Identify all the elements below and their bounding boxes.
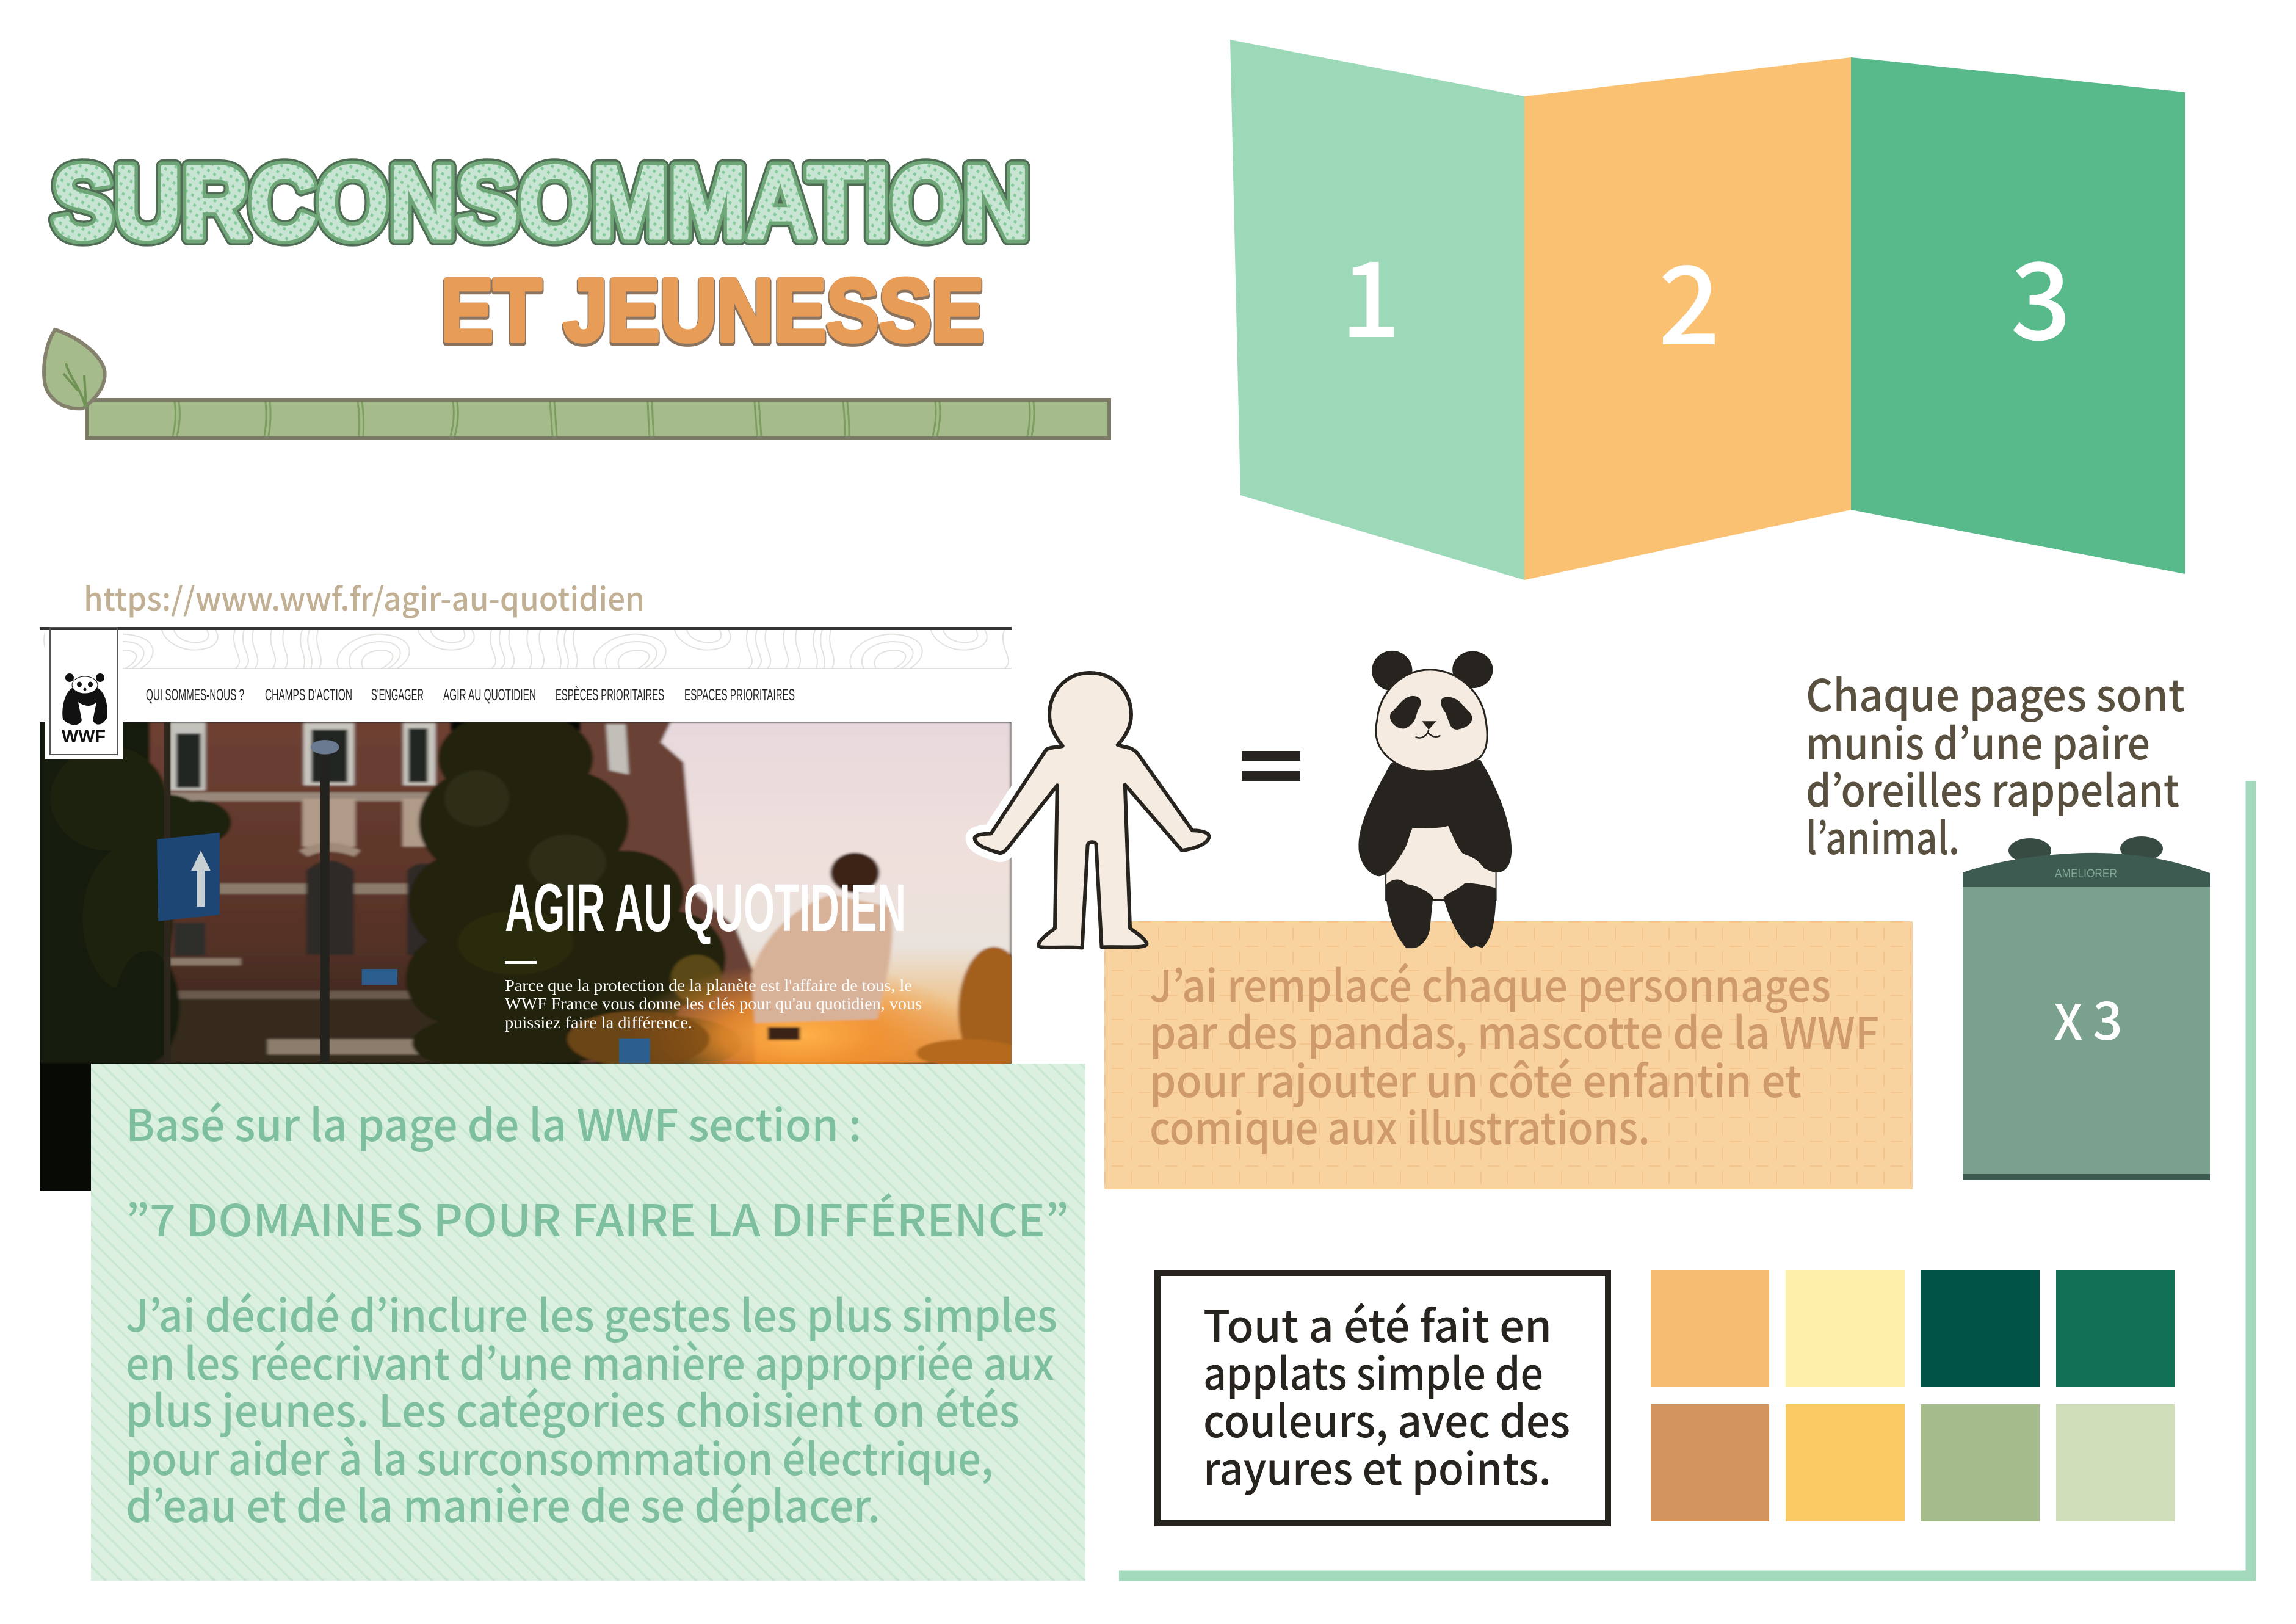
icon: human figure bbox=[975, 673, 1209, 948]
fold panel 1 bbox=[1230, 40, 1524, 580]
panda explanation text: comique aux illustrations. bbox=[1150, 1093, 1650, 1157]
title: SURCONSOMMATION: SURCONSOMMATION bbox=[52, 145, 1030, 261]
hero photo bbox=[40, 710, 1029, 1192]
text block: ears description: munis d’une paire bbox=[1806, 708, 2150, 772]
panda explanation text: pour rajouter un côté enfantin et bbox=[1150, 1046, 1802, 1110]
colour palette swatches bbox=[1651, 1270, 2175, 1521]
frame: bottom-right corner line bbox=[1119, 781, 2251, 1576]
fold panel 3: 3 bbox=[2010, 216, 2071, 371]
title: SURCONSOMMATION: SURCONSOMMATION bbox=[52, 145, 1030, 261]
source URL: https://www.wwf.fr/agir-au-quotidien bbox=[84, 574, 645, 620]
text block: flat colors note: Tout a été fait en bbox=[1203, 1291, 1552, 1355]
text block: ears description bbox=[1806, 660, 2185, 867]
site navigation: ESPÈCES PRIORITAIRES bbox=[556, 686, 664, 704]
site navigation bbox=[146, 686, 795, 704]
page card with ears: AMELIORER bbox=[2055, 868, 2117, 880]
site navigation: S'ENGAGER bbox=[371, 686, 424, 704]
text block: ears description: d’oreilles rappelant bbox=[1806, 755, 2179, 819]
screenshot header band bbox=[40, 627, 1012, 722]
title: SURCONSOMMATION: SURCONSOMMATION bbox=[52, 145, 1030, 261]
explanation text bbox=[126, 1090, 1069, 1535]
fold panels illustration bbox=[1230, 40, 2185, 580]
site navigation: QUI SOMMES-NOUS ? bbox=[146, 686, 244, 704]
logo tab bbox=[45, 628, 123, 759]
bamboo divider with leaf bbox=[44, 330, 1109, 438]
explanation text: plus jeunes. Les catégories choisient on étés bbox=[126, 1376, 1019, 1440]
explanation text: pour aider à la surconsommation électrique, bbox=[126, 1424, 993, 1488]
label: times three: 3 bbox=[2093, 979, 2123, 1055]
text block: ears description: l’animal. bbox=[1806, 803, 1960, 867]
explanation text: Basé sur la page de la WWF section : bbox=[126, 1090, 861, 1154]
fold panel 1: 1 bbox=[1341, 215, 1400, 368]
text block: flat colors note: applats simple de bbox=[1203, 1338, 1543, 1402]
WWF website screenshot bbox=[40, 627, 1029, 1192]
text block: ears description: Chaque pages sont bbox=[1806, 660, 2185, 724]
icon: equals sign bbox=[1242, 751, 1300, 781]
panel: WWF explanation bbox=[91, 1064, 1085, 1581]
figure halo over photo bbox=[975, 673, 1209, 948]
explanation text: J’ai décidé d’inclure les gestes les plus simples bbox=[126, 1280, 1057, 1344]
fold panel 2: 2 bbox=[1658, 219, 1720, 376]
text block: flat colors note: couleurs, avec des bbox=[1203, 1386, 1570, 1450]
hero paragraph: Parce que la protection de la planète est l'affaire de tous, le bbox=[505, 976, 912, 995]
site navigation: ESPACES PRIORITAIRES bbox=[684, 686, 795, 704]
subtitle: ET JEUNESSE: ET JEUNESSE bbox=[441, 262, 984, 361]
bamboo stem bbox=[87, 400, 1109, 438]
panda explanation text: J’ai remplacé chaque personnages bbox=[1150, 951, 1831, 1015]
label: times three bbox=[2054, 979, 2123, 1055]
subtitle: ET JEUNESSE: ET JEUNESSE bbox=[441, 260, 984, 360]
WWF panda logo: WWF bbox=[62, 727, 106, 745]
hero headline bbox=[505, 871, 906, 964]
text block: flat colors note: rayures et points. bbox=[1203, 1434, 1551, 1498]
panda explanation text bbox=[1150, 951, 1879, 1157]
leaf bbox=[44, 330, 105, 408]
panel: panda explanation bbox=[1104, 921, 1913, 1189]
explanation text: d’eau et de la manière de se déplacer. bbox=[126, 1471, 880, 1535]
site navigation: CHAMPS D'ACTION bbox=[265, 686, 352, 704]
site navigation: AGIR AU QUOTIDIEN bbox=[443, 686, 536, 704]
label: times three: X bbox=[2054, 984, 2083, 1054]
panda explanation text: par des pandas, mascotte de la WWF bbox=[1150, 998, 1879, 1062]
icon: panda bbox=[1358, 651, 1512, 948]
hero headline: AGIR AU QUOTIDIEN bbox=[505, 871, 906, 946]
text block: flat colors note bbox=[1157, 1273, 1608, 1523]
page card with ears bbox=[1963, 836, 2210, 1180]
fold panel 3 bbox=[1851, 57, 2185, 574]
hero paragraph: WWF France vous donne les clés pour qu'au quotidien, vous bbox=[505, 995, 922, 1013]
WWF panda logo bbox=[62, 673, 107, 745]
explanation text: ”7 DOMAINES POUR FAIRE LA DIFFÉRENCE” bbox=[126, 1185, 1069, 1249]
explanation text: en les réecrivant d’une manière appropriée aux bbox=[126, 1329, 1054, 1393]
hero paragraph bbox=[505, 976, 922, 1032]
hero paragraph: puissiez faire la différence. bbox=[505, 1013, 692, 1032]
fold panel 2 bbox=[1524, 57, 1851, 580]
